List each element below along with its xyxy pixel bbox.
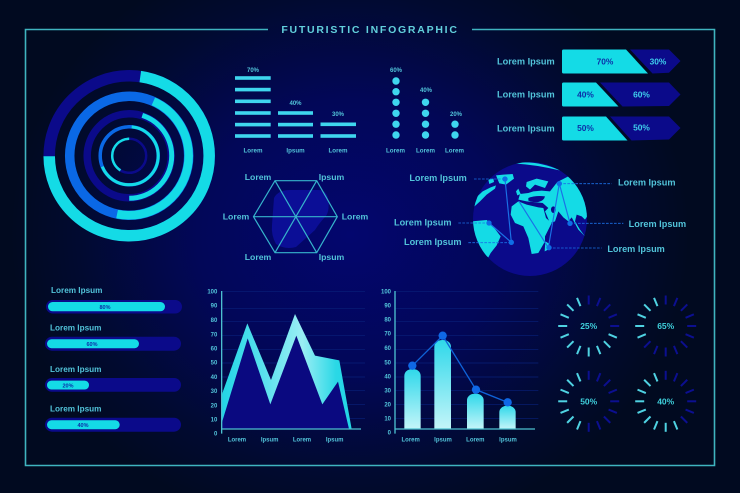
globe labels: Lorem Ipsum [404,237,461,247]
arrow row 2: 60% [633,90,650,100]
area chart labels: 10 [211,417,218,423]
gauge 40%: 40% [657,396,675,406]
radial tick gauges [558,296,696,432]
area chart [207,289,365,444]
dot column chart: 20% [450,112,463,118]
area chart labels: 60 [211,347,218,353]
bar chart labels: Ipsum [434,438,452,444]
bar chart labels: 20 [384,403,392,409]
bar and line chart [381,289,538,444]
progress row 40%: 40% [77,423,89,429]
bar chart labels: 90 [384,303,392,309]
bar chart labels: 30 [384,389,392,395]
progress row 80% [46,286,182,314]
line stack bar chart: Lorem [244,148,263,154]
arrow row 3 [497,116,680,140]
inland seas [528,196,556,213]
hexagon radar chart: Lorem [245,252,272,262]
area chart labels: 40 [211,375,218,381]
area chart labels: 0 [214,431,218,437]
globe labels: Lorem Ipsum [409,173,467,183]
globe labels: Lorem Ipsum [607,244,665,254]
back area [222,314,352,429]
arrow row 1: 30% [650,56,667,66]
dot column chart [386,68,464,154]
dot column chart: 60% [390,68,403,74]
line stack bar chart [235,68,356,154]
bar chart labels: Lorem [466,438,484,444]
globe labels: Lorem Ipsum [618,178,675,188]
title: FUTURISTIC INFOGRAPHIC [281,24,459,36]
arrow row 1: Lorem Ipsum [497,56,555,66]
progress row 20% [45,365,181,392]
bar chart labels: 60 [384,346,392,352]
arrow row 2: 40% [577,90,594,100]
area chart labels: 80 [211,318,218,324]
gauge 50%: 50% [580,396,598,406]
area chart labels: 30 [211,389,218,395]
area chart labels [207,289,343,444]
world globe with labelled network [394,162,686,276]
dot column chart: Lorem [416,148,435,154]
progress row 20%: Lorem Ipsum [50,365,101,374]
leader lines [458,179,623,248]
gauge 65%: 65% [657,321,675,331]
continents [472,162,588,257]
bars [404,340,516,429]
globe labels: Lorem Ipsum [629,219,686,229]
bar chart labels: 0 [388,431,392,437]
area chart labels: Ipsum [261,438,278,444]
progress row 40%: Lorem Ipsum [50,404,101,414]
hexagon radar chart [223,172,369,262]
area chart labels: Lorem [228,438,246,444]
bar chart labels: 50 [384,360,392,366]
bar chart labels: Ipsum [499,438,517,444]
arrow row 3: Lorem Ipsum [497,124,555,134]
front area [222,336,349,429]
area chart labels: Ipsum [326,438,343,444]
line stack bar chart: Lorem [329,148,348,154]
arrow row 1: 70% [597,56,614,66]
area chart labels: 90 [211,303,218,309]
progress row 60%: Lorem Ipsum [50,324,101,332]
bar chart labels: 100 [381,289,392,295]
network nodes [486,176,573,250]
area chart labels: 20 [211,403,218,409]
arrow row 3: 50% [633,122,650,132]
bar chart labels: 10 [384,417,392,423]
area chart labels: 70 [211,332,218,338]
hexagon radar chart: Lorem [245,172,272,182]
progress row 80%: Lorem Ipsum [51,286,102,295]
globe labels: Lorem Ipsum [394,217,451,227]
area chart labels: 100 [207,289,218,295]
bar chart labels [381,289,517,444]
concentric radial chart [49,76,209,236]
bar chart labels: 40 [384,375,392,381]
progress row 20%: 20% [62,384,74,390]
progress row 80%: 80% [99,305,111,311]
network lines [489,179,570,248]
hexagon radar chart: Lorem [342,212,369,222]
dot column chart: Lorem [445,148,464,154]
arrow row 3: 50% [577,123,594,133]
gauge 25%: 25% [580,321,598,331]
line stack bar chart: 70% [247,68,260,74]
arrow row 2 [497,82,680,106]
dot column chart: 40% [420,88,433,94]
split percentage arrows [497,50,680,140]
bar chart labels: Lorem [402,438,420,444]
progress row 60% [45,324,181,351]
globe labels [394,173,686,254]
progress row 40% [45,404,181,432]
progress bars [45,286,182,432]
arrow row 2: Lorem Ipsum [497,90,555,100]
area chart labels: Lorem [293,438,311,444]
hexagon radar chart: Ipsum [319,252,345,262]
line stack bar chart: Ipsum [286,148,305,154]
bar chart labels: 70 [384,332,392,338]
dot column chart: Lorem [386,148,405,154]
trend line [408,331,512,406]
line stack bar chart: 30% [332,112,345,118]
hexagon radar chart: Lorem [223,212,250,222]
progress row 60%: 60% [86,342,98,348]
line stack bar chart: 40% [289,101,302,107]
arrow row 1 [497,50,680,74]
bar chart labels: 80 [384,318,392,324]
area chart labels: 50 [211,361,218,367]
hexagon radar chart: Ipsum [319,172,345,182]
